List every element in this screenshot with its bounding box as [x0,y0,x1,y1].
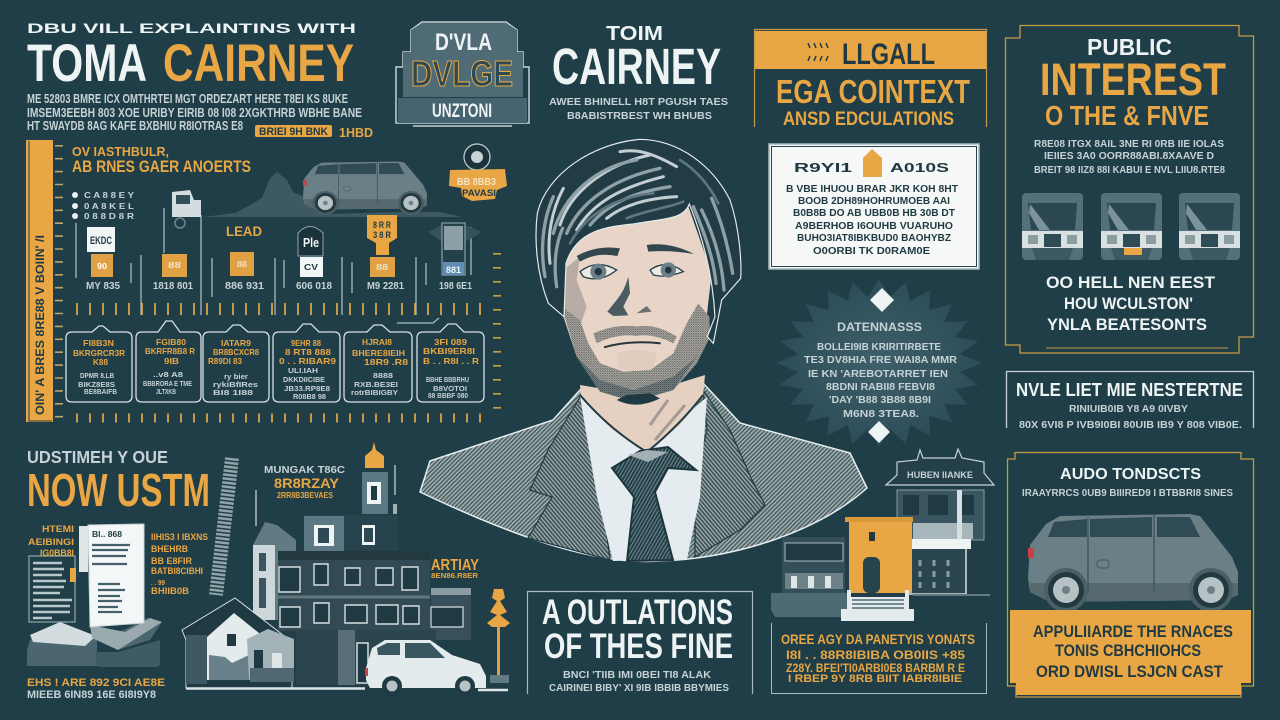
orange tag: BRIEI 9H BNK [259,126,328,138]
heading: Tom Cairney center: CAIRNEY [552,38,721,95]
intro text block: ME 52803 BMRE ICX OMTHRTEI MGT ORDEZART HERE T8EI KS 8UKE [27,91,348,106]
bottom caption: MIEEB 6IN89 16E 6I8I9Y8 [27,689,156,701]
panel: white notice card: BUHO3IAT8IBKBUD0 BAOHYBZ [797,232,952,244]
heading: Tom Cairney center: TOIM [606,23,663,45]
dark left building [782,537,845,593]
card 5 [344,325,412,402]
card 5: 8888 [373,371,393,380]
callout: starburst: M6N8 3TEA8. [843,408,919,420]
card 3: IATAR9 [221,338,251,348]
panel: public interest [1006,26,1254,353]
card 6: B8VOTOI [433,384,467,393]
panel: public interest: PUBLIC [1087,34,1172,60]
caption: orange text box: Z28Y. BFEI'TI0ARBI0E8 BARBM R E [786,661,965,675]
heading: Tom Cairney center: B8ABISTRBEST WH BHUBS [567,110,712,122]
orange conditions box: ORD DWISL LSJCN CAST [1036,662,1224,681]
card 2: JLTXKB [156,387,176,396]
eyes [580,265,617,279]
panel: outlations of the fine: BNCI 'TIIB IMI 0BEI TI8 ALAK [563,669,711,681]
clock tower [362,442,397,514]
callout: orange badge with portrait circle: PAVASI [462,188,496,198]
caption: orange text box: I8I . . 88R8IBIBA OB0IIS +85 [786,648,965,662]
steps [841,590,914,621]
neck [580,375,705,451]
panel: public interest: INTEREST [1040,54,1226,105]
panel: timeline [26,140,507,422]
callout: orange badge with portrait circle [449,144,507,201]
ladder [216,458,232,595]
doc left caption: IG0BB8I [40,548,74,559]
icon: orange tree [487,589,510,683]
vertical orange sidebar [26,140,53,422]
icon: white van [365,640,486,696]
caption: orange text box [772,623,986,694]
panel: note box: NVLE LIET MIE NESTERTNE [1016,380,1243,400]
mountain silhouette [203,172,462,217]
doc left caption [28,524,74,559]
callout: starburst: TE3 DV8HIA FRE WAI8A MMR [804,354,957,366]
intro text block: IMSEM3EEBH 803 XOE URIBY EIRIB 08 I08 2XGKTHRB WBHE BANE [27,105,362,120]
tie [612,447,696,561]
books [27,618,162,667]
title: Toma Cairney: TOMA [27,34,147,93]
panel: note box: RINIUIB0IB Y8 A9 0IVBY [1069,403,1188,415]
orange tag [255,125,373,140]
vertical orange sidebar: OIN' A BRES 8RE88 V BOIIN' /I [33,235,47,415]
timeline step 5 [367,215,404,292]
timeline step 3: 88 [237,260,248,269]
card 3: ry bier [224,372,248,381]
timeline step 1 [86,227,120,292]
left form [29,556,76,622]
doc right caption: IIHIS3 I IBXNS [151,532,208,543]
panel: outlations of the fine: OF THES FINE [544,627,733,666]
timeline step 1: EKDC [90,235,112,247]
doc left caption: HTEMI [42,524,74,535]
card 3 [203,325,269,402]
top roofed building: HUBEN IIANKE [907,470,973,480]
panel: public interest: BREIT 98 IIZ8 88I KABUI E NVL LIIU8.RTE8 [1034,164,1225,176]
timeline step 2: 88 [168,261,182,270]
timeline step 4: 606 018 [296,280,332,292]
right glass building [903,539,990,596]
orange conditions box: APPULIIARDE THE RNACES [1033,622,1233,641]
header: Toma Cairney title block: DBU VILL EXPLAINTINS WITH [27,20,356,36]
orange conditions box: TONIS CBHCHIOHCS [1055,641,1201,660]
left tower [253,490,296,620]
card 1: BIKZ8E8S [78,380,115,389]
header: Toma Cairney title block [27,20,373,140]
callout: starburst: DATENNASSS [837,320,922,334]
card 5: RXB.BE3EI [354,380,398,389]
timeline step 4: CV [304,263,319,272]
heading: Tom Cairney center: AWEE BHINELL H8T PGUSH TAES [549,96,728,108]
panel: public interest: HOU WCULSTON' [1064,295,1193,313]
badge: DVLA sign: DVLGE [411,53,513,94]
timeline step 6 [428,223,482,292]
card 2: BKRFR8B8 R [145,346,195,356]
callout: orange badge with portrait circle: BB 8BB3 [457,177,496,188]
card 4 [273,324,340,402]
card 1: DPMR 8.LB [80,371,114,380]
shirt and collar [580,397,707,561]
small house [182,598,294,688]
panel: legal context: ANSD EDCULATIONS [783,109,954,130]
timeline step 1: MY 835 [86,280,120,292]
timeline step 3: 886 931 [225,280,264,292]
panel: auto products [1008,452,1254,697]
card 6: BKBI9ER8I [423,346,475,356]
timeline step 4: Ple [303,235,319,250]
beard [562,303,710,402]
panel: outlations of the fine [528,592,752,694]
panel: white notice card: A9BERHOB I6OUHB VUARUHO [795,220,953,232]
doc left caption: AEIBINGI [28,537,74,548]
timeline step 5: 8 R R [373,220,391,230]
portrait: man in suit [420,139,867,561]
card 4: JB33.RP8E8 [284,384,330,393]
badge: DVLA sign [396,22,529,126]
card 5: rotrBIBIGBY [351,388,398,397]
card 6: B . . R8I . . R [423,356,479,366]
card 4: 9EHR 88 [291,338,321,348]
timeline step 5: 3 8 R [373,230,391,240]
heading: now ustm: NOW USTM [27,464,210,516]
card 3: R89DI 83 [208,356,242,366]
panel: public interest: R8E08 ITGX 8AIL 3NE RI 0RB IIE IOLAS [1034,138,1224,150]
card 6: BBHE BBBRHU [426,375,469,384]
callout: starburst: 'DAY 'B88 3B88 8B9I [829,394,931,406]
timeline step 4 [296,226,332,292]
card 4: R08B8 98 [293,392,326,401]
label: artiay: ARTIAY [431,557,479,574]
card 1: BE8BAIFB [84,387,118,396]
card 5: BHERE8IEIH [352,348,405,358]
mouth [604,342,661,347]
icon: van [303,162,427,215]
panel: auto products: IRAAYRRCS 0UB9 BIIIRED9 I BTBBRI8 SINES [1022,487,1233,499]
title: Toma Cairney: CAIRNEY [163,34,354,93]
callout: starburst: BOLLEI9IB KRIRITIRBETE [817,341,941,353]
card 3: BI8 1I88 [213,388,253,397]
arched caption [264,464,345,500]
panel: note box: 80X 6VI8 P IVB9I0BI 80UIB IB9 Y 808 VIB0E. [1019,419,1242,431]
label: artiay: 8EN86.R8ER [431,571,479,580]
panel: note box [1006,372,1254,431]
bullet list: 0 A 8 K E L [84,201,134,211]
timeline step 3: LEAD [226,223,262,239]
timeline step 2 [153,190,201,292]
timeline step 6: 881 [446,265,461,275]
card 4: 8 RT8 888 [285,347,331,357]
nose [607,277,630,316]
caption: orange text box: I RBEP 9Y 8RB BIIT IABR8IBIE [788,673,962,685]
illustration: documents and books [27,524,208,701]
card 2: FGIB80 [156,337,186,347]
callout: starburst: IE KN 'AREBOTARRET IEN [808,368,948,380]
top roofed building [886,449,994,540]
timeline step 6: 198 6E1 [439,280,472,292]
illustration: town buildings [182,442,510,696]
panel: outlations of the fine: A OUTLATIONS [542,593,733,632]
heading: Tom Cairney center [549,23,728,122]
main building [278,515,471,685]
card 6 [417,324,484,402]
panel: white notice card: O0ORBI TK D0RAM0E [813,245,930,257]
orange conditions box [1010,610,1251,695]
lapels [528,397,610,560]
panel: white notice card: B0B8B DO AB UBB0B HB 30B DT [793,207,956,219]
timeline step 2: 1818 801 [153,280,193,292]
bullet list: 0 8 8 D 8 R [84,211,134,221]
bullet list: C A 8 8 E Y [84,190,134,200]
timeline heading: AB RNES GAER ANOERTS [72,157,251,176]
card 5: HJRAI8 [362,337,392,347]
doc right caption: BB E8FIR [151,556,192,567]
arched caption: 8R8RZAY [274,475,340,491]
panel: public interest: YNLA BEATESONTS [1047,316,1207,334]
intro text block: HT SWAYDB 8AG KAFE BXBHIU R8IOTRAS E8 [27,118,243,133]
card 4: DKKDIICIBE [283,375,325,384]
caption: orange text box: OREE AGY DA PANETYIS YONATS [781,631,975,647]
panel: legal context [754,30,986,130]
card 4: ULI.IAH [288,366,318,375]
panel: white notice card: A010S [890,160,949,175]
panel: public interest: IEIIES 3A0 OORR88ABI.8XAAVE D [1044,150,1214,162]
timeline heading: OV IASTHBULR, [72,145,169,159]
panel: legal context: EGA COINTEXT [776,73,970,110]
icons: three buses [1022,193,1240,260]
timeline step 1: 90 [97,262,108,271]
icon: tag [863,149,882,177]
heading: now ustm: UDSTIMEH Y OUE [27,447,168,467]
doc right caption: . . 99 [151,580,165,587]
arched caption: 2RR8B3BEVAES [277,490,333,500]
brows [577,244,694,262]
white document: BI.. 868 [92,530,123,539]
badge: DVLA sign: UNZTONI [432,101,492,122]
panel: auto products: AUDO TONDSCTS [1060,466,1201,483]
panel: outlations of the fine: CAIRINEI BIBY' XI 9IB IBBIB BBYMIES [549,682,729,694]
card 3: BR8BCXCR8 [213,347,259,357]
doc right caption: BHIIB0B [151,586,189,597]
panel: white notice card [769,144,979,269]
card 1: BKRGRCR3R [73,348,125,358]
bottom caption [27,677,165,701]
timeline step 5: M9 2281 [367,280,404,292]
label: artiay [431,557,479,580]
card 2: ..v8 A8 [153,370,183,379]
timeline heading [72,145,251,176]
hair [536,139,741,343]
hair streaks [543,151,733,290]
bullet list [72,190,134,221]
card 4: 0 . . RIBAR9 [279,356,336,366]
orange tag: 1HBD [339,125,373,140]
timeline step 3 [225,223,264,292]
bottom caption: EHS ! ARE 892 9CI AE8E [27,677,165,689]
intro text block [27,91,362,133]
title: Toma Cairney [27,34,354,93]
ground [771,593,850,617]
callout: starburst: 8BDNI RABII8 FEBVI8 [826,381,935,393]
panel: legal context: LLGALL [842,38,935,71]
card 1: FI8B3N [83,338,114,348]
ground line [186,688,508,690]
arched caption: MUNGAK T86C [264,464,345,476]
white document [79,524,144,627]
timeline step 5: 88 [376,263,389,272]
card 5: 18R9 .R8 [364,357,408,367]
panel: white notice card: R9YI1 [794,160,852,175]
badge: DVLA sign: D'VLA [435,29,492,56]
card 2 [136,321,201,402]
jacket [420,383,867,561]
icon: grey van [1028,514,1238,612]
card 2: BBBRORA E TME [143,379,192,388]
doc right caption: BATBI8CIBHI [151,566,203,577]
panel: public interest: O THE & FNVE [1045,100,1209,131]
card 1 [66,326,132,402]
panel: white notice card: BOOB 2DH89HOHRUMOEB AAI [798,195,950,207]
panel: white notice card: B VBE IHUOU BRAR JKR KOH 8HT [786,183,959,195]
doc right caption [151,532,208,597]
card 6: 3FI 089 [434,337,467,347]
temple shadow [563,257,587,337]
doc right caption: BHEHRB [151,544,188,555]
panel: public interest: OO HELL NEN EEST [1046,274,1215,292]
heading: now ustm [27,447,210,516]
card 2: 9IB [164,356,179,366]
card 6: 88 BBBF 080 [428,391,468,400]
callout: starburst [776,279,982,447]
card 3: rykiBfIRes [213,380,258,389]
illustration: orange house and buildings [771,449,994,621]
orange building [845,517,913,593]
card 1: K88 [93,357,108,367]
face skin [562,202,712,402]
head [536,139,741,405]
